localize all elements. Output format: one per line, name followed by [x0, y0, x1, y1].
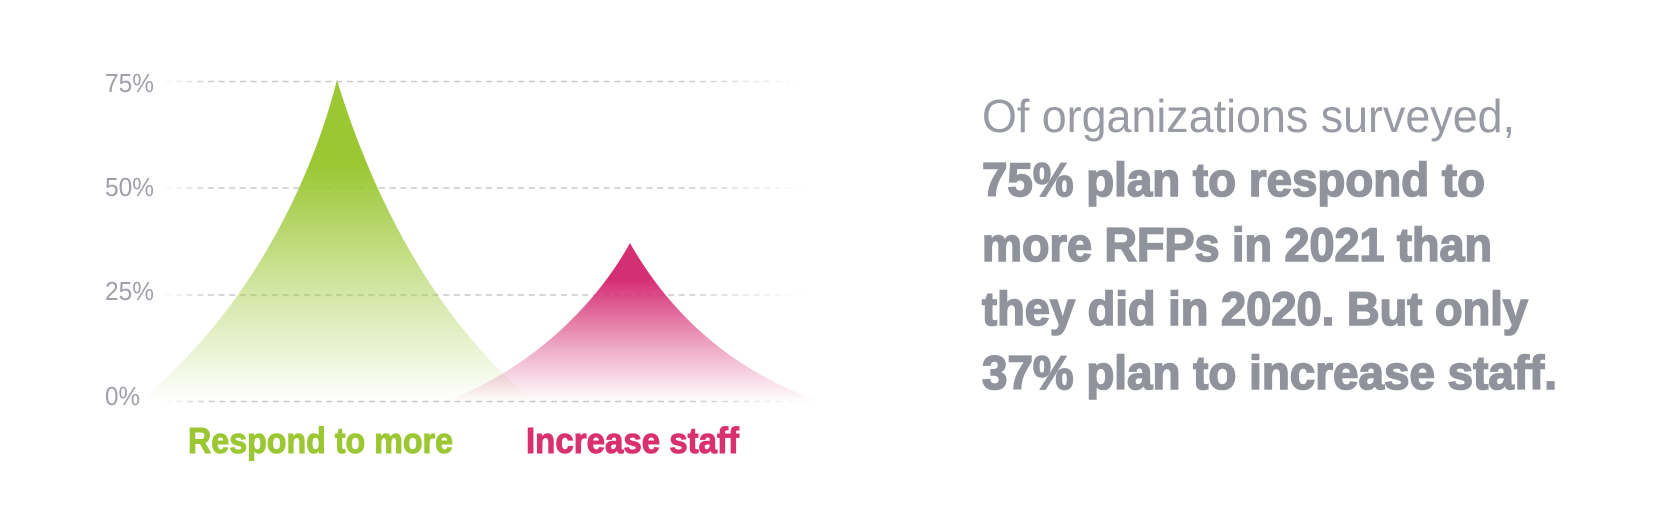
chart: respond to more vs increase staff — [105, 68, 825, 461]
y axis labels: 50% — [105, 172, 154, 202]
peak: increase staff, 37% — [443, 243, 825, 403]
y axis labels: 25% — [105, 276, 154, 306]
peak: respond to more, 75% — [150, 80, 535, 402]
text block: survey statement — [982, 90, 1557, 399]
y axis labels: 75% — [105, 68, 154, 98]
text block: survey statement: they did in 2020. But only — [982, 282, 1528, 335]
y axis labels — [105, 68, 154, 411]
text block: survey statement: more RFPs in 2021 than — [982, 218, 1492, 271]
text block: survey statement: Of organizations surveyed, — [982, 90, 1515, 142]
text block: survey statement: 75% plan to respond to — [982, 153, 1485, 206]
text block: survey statement: 37% plan to increase staff. — [982, 346, 1557, 399]
label: respond to more: Respond to more — [188, 420, 453, 461]
label: increase staff: Increase staff — [526, 420, 740, 461]
y axis labels: 0% — [105, 381, 140, 411]
